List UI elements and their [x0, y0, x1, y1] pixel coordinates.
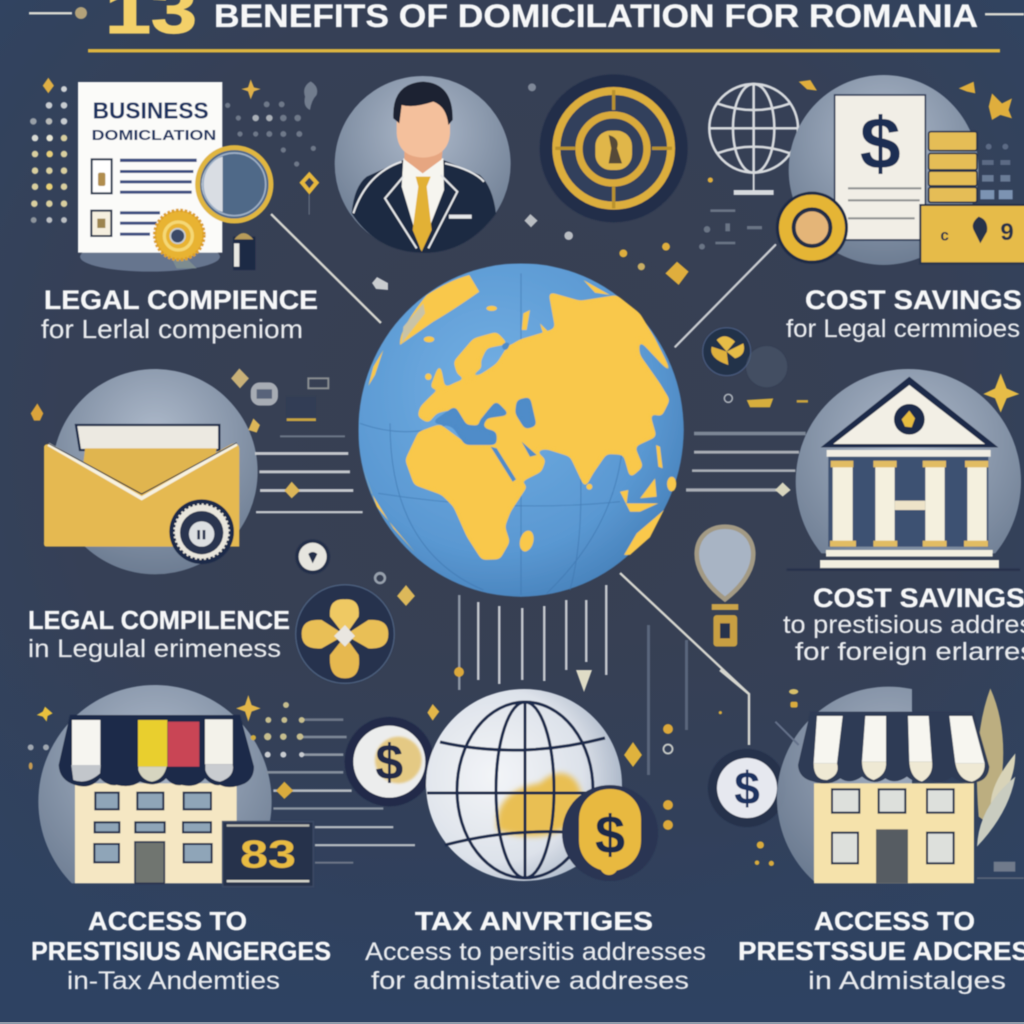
connector line: document to globe	[271, 214, 381, 323]
soft base under document	[80, 242, 220, 272]
text block: legal compliance top	[41, 285, 318, 344]
connector line: cost savings to globe	[620, 573, 749, 694]
disc	[776, 686, 913, 882]
pediment medallion	[894, 404, 925, 435]
panel: tax globe	[426, 689, 658, 881]
heading: TAX ANVRTIGES	[415, 906, 653, 936]
text block: cost savings middle	[783, 583, 1024, 666]
dim marks	[699, 209, 762, 250]
continent: eurasia	[417, 292, 675, 488]
gold ring coin	[776, 192, 848, 264]
building	[814, 783, 974, 883]
gold cross badge	[296, 585, 394, 683]
panel: business domiciliation document	[30, 78, 319, 272]
small gold marks	[719, 689, 798, 866]
text block: access bottom right	[738, 906, 1024, 995]
heading line 1: ACCESS TO	[88, 906, 247, 936]
heading: LEGAL COMPIENCE	[44, 285, 318, 315]
continent: edge crescents	[363, 280, 664, 555]
awning	[59, 715, 254, 787]
dim icons	[251, 378, 328, 422]
subtext: in-Tax Andemties	[67, 967, 280, 995]
heading line 1: ACCESS TO	[814, 906, 975, 936]
price sign: 83	[240, 833, 296, 876]
continent: north america	[400, 275, 479, 345]
meridians and parallels	[427, 702, 622, 878]
gold cash box	[920, 205, 1024, 263]
disc	[789, 75, 979, 265]
document heading: BUSINESS	[93, 97, 209, 123]
red sea and gulf	[491, 442, 537, 482]
envelope outline	[48, 443, 237, 494]
continent: scandinavia	[453, 332, 508, 378]
small grey gem	[372, 277, 388, 290]
lock keyhole	[595, 131, 632, 170]
panel: bank temple	[686, 328, 1021, 647]
diagonal accent	[775, 722, 799, 745]
continent: britain	[429, 362, 445, 389]
ground line	[977, 877, 1024, 879]
heading: COST SAVINGS	[805, 285, 1022, 315]
sparkles and small marks	[524, 80, 1012, 285]
gold diamond pin	[299, 172, 319, 215]
gold landmass	[497, 773, 581, 836]
central globe	[358, 263, 684, 597]
lapel lines	[353, 162, 484, 248]
continents	[405, 292, 675, 560]
portrait disc	[335, 76, 511, 252]
balloon mark	[304, 81, 317, 110]
steps	[820, 550, 999, 568]
letter sheet	[76, 425, 219, 450]
gold cash box: c	[940, 228, 949, 245]
panel: right dollar badge	[708, 670, 786, 827]
subtext line 1: Access to persitis addresses	[365, 938, 706, 966]
door	[135, 842, 164, 883]
gold seal	[155, 210, 204, 268]
globe grid	[360, 273, 623, 595]
emblem face	[557, 92, 670, 205]
gold dollar coin: $	[595, 805, 625, 865]
door	[876, 829, 908, 883]
dot grid	[30, 78, 67, 223]
entablature	[827, 450, 991, 457]
subtext: for Legal cermmioes	[786, 315, 1020, 343]
columns	[830, 461, 988, 547]
pale ice patch	[402, 303, 425, 343]
heading: COST SAVINGS	[813, 583, 1024, 613]
white pin button	[295, 539, 330, 574]
leaves	[977, 688, 1015, 847]
shirt	[402, 158, 444, 250]
emblem dark disc	[540, 74, 688, 222]
panel: cost savings invoice and coins	[524, 75, 1024, 347]
mini label	[994, 862, 1015, 872]
panel: right dollar badge: $	[734, 762, 760, 814]
document text lines	[120, 159, 197, 236]
sparkle	[241, 79, 261, 99]
gold sparkles	[37, 695, 439, 799]
right dot grid	[225, 101, 316, 167]
panel: right shop	[718, 686, 1024, 884]
envelope seal	[169, 499, 234, 564]
disc	[52, 369, 258, 574]
pediment	[821, 377, 998, 447]
heading line 2: PRESTISIUS ANGERGES	[31, 936, 331, 966]
magnifier	[697, 527, 753, 647]
sphere	[426, 689, 622, 881]
globe ocean	[358, 263, 684, 597]
disc	[795, 368, 1022, 554]
title left rule and ornament	[29, 7, 87, 19]
envelope inner pocket	[83, 448, 217, 497]
dark gold badge	[703, 328, 751, 376]
document sheet	[78, 82, 222, 253]
connector line	[675, 245, 775, 347]
subtext line 2: for foreign erlarres	[795, 638, 1024, 666]
document thumbnails	[91, 159, 112, 236]
suit	[352, 160, 496, 253]
dim gears	[724, 346, 808, 407]
invoice sheet	[835, 95, 925, 240]
text block: tax advantages bottom center	[365, 906, 706, 995]
small ring	[375, 574, 385, 583]
text block: access bottom left	[31, 906, 331, 995]
invoice dollar sign: $	[860, 102, 901, 184]
side dashes	[255, 435, 363, 513]
side dashes	[686, 432, 806, 492]
gold tie	[413, 177, 432, 252]
subtext line 2: for admistative addreses	[371, 967, 689, 995]
heading line 2: PRESTSSUE ADCRES	[738, 936, 1024, 966]
subtext: in Admistalges	[808, 967, 1006, 995]
envelope body	[44, 443, 239, 547]
inland seas	[431, 341, 537, 445]
price sign	[223, 822, 313, 887]
panel: vertical connector stems	[375, 573, 688, 830]
face	[397, 100, 450, 158]
title banner	[29, 0, 1024, 52]
awning	[798, 712, 989, 784]
small dots	[28, 702, 305, 770]
dollar coin	[345, 717, 434, 806]
coin stack	[929, 132, 977, 202]
windows	[832, 789, 954, 863]
subtext: in Legulal erimeness	[28, 635, 281, 663]
panel: envelope	[31, 368, 394, 683]
emblem rings	[555, 90, 672, 208]
dollar coin: $	[375, 734, 403, 790]
neck	[404, 143, 443, 173]
heading: LEGAL COMPILENCE	[28, 605, 290, 635]
panel: gold lock emblem	[540, 74, 688, 222]
side lines	[267, 718, 415, 864]
disc	[38, 684, 272, 884]
text block: legal compliance middle	[28, 605, 290, 663]
gold star	[983, 373, 1019, 413]
minor islands	[424, 306, 676, 553]
title right rule	[985, 13, 1024, 16]
subtext line 1: to prestisious addres	[783, 611, 1024, 639]
continent: africa	[405, 424, 528, 560]
gold cash box: 9	[1000, 219, 1014, 246]
panel: businessman portrait	[335, 76, 511, 253]
windows	[94, 793, 212, 862]
magnifying glass	[198, 148, 271, 270]
invoice lines	[848, 187, 921, 219]
panel: left shop	[28, 685, 439, 918]
text block: cost savings top	[786, 285, 1022, 343]
gold title divider	[88, 49, 1000, 52]
subtext: for Lerlal compeniom	[41, 314, 303, 344]
grey side dots	[980, 144, 1013, 199]
colonnade backing	[828, 457, 988, 547]
envelope flap edge	[48, 444, 237, 498]
document subheading: DOMICLATION	[92, 128, 216, 144]
building	[75, 783, 237, 883]
icon: wire globe on stand	[709, 84, 798, 195]
gold dollar coin	[562, 785, 658, 881]
gold markers	[31, 368, 300, 498]
hair	[393, 82, 453, 125]
